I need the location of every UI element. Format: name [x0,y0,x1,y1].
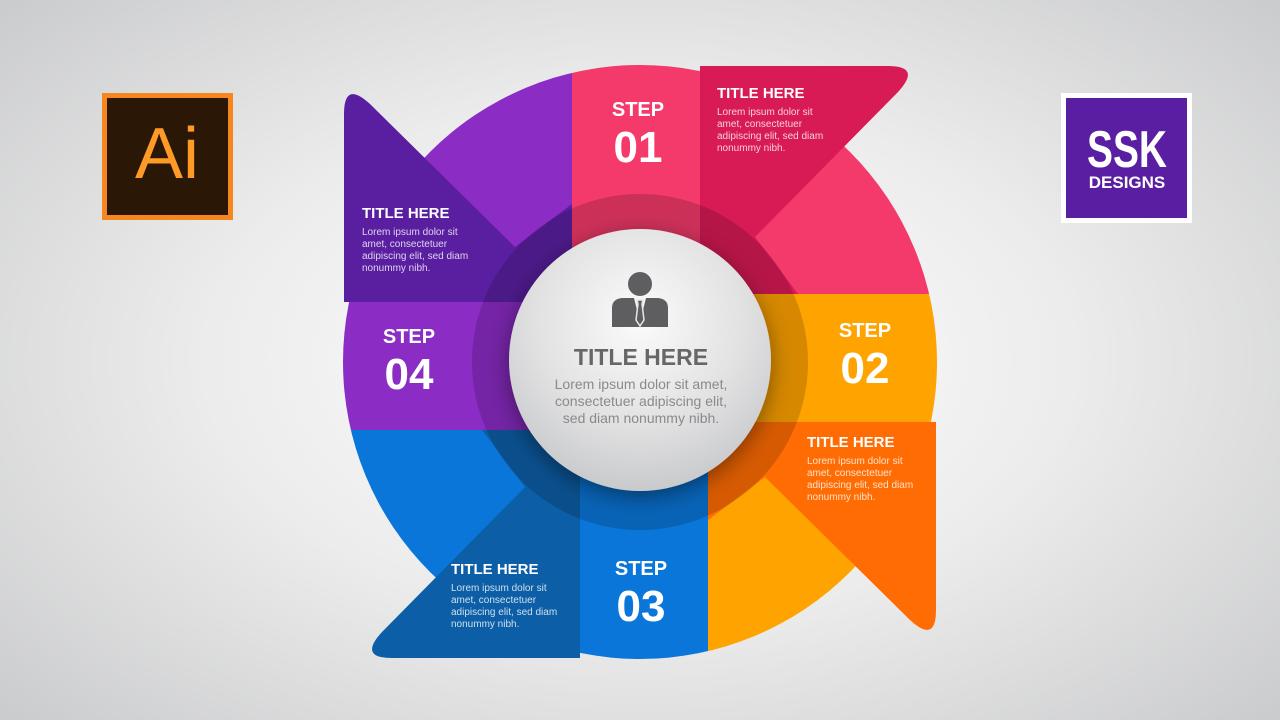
step 02 label: 02 [841,344,889,393]
text block: step 04: TITLE HERE [362,205,450,222]
text block: step 02: amet, consectetuer [807,468,893,479]
cycle diagram [343,65,937,659]
text block: step 01: Lorem ipsum dolor sit [717,107,813,118]
center text: consectetuer adipiscing elit, [555,393,727,409]
text block: step 02: TITLE HERE [807,434,895,451]
icon: Adobe Illustrator logo: Ai [135,114,199,194]
text block: step 01: TITLE HERE [717,85,805,102]
icon: SSK Designs logo: SSK [1087,121,1167,179]
inner dark ring [472,194,808,530]
icon: SSK Designs logo [1064,96,1190,220]
text block: step 03: adipiscing elit, sed diam [451,607,557,618]
step 03 label [615,558,667,631]
step 02 label: STEP [839,320,891,342]
text block: step 03: Lorem ipsum dolor sit [451,583,547,594]
text block: step 01 [717,85,823,154]
tab: step 03 [372,430,580,658]
text block: step 04: nonummy nibh. [362,263,430,274]
text block: step 02: adipiscing elit, sed diam [807,480,913,491]
text block: step 02 [807,434,913,503]
step 02 label [839,320,891,393]
icon: Adobe Illustrator logo [104,96,230,218]
center title: TITLE HERE [574,344,708,370]
ring segments (light) [343,65,937,659]
icon: person [612,272,668,327]
center text: Lorem ipsum dolor sit amet, [555,376,727,392]
step 03 label: 03 [617,582,665,631]
center text: sed diam nonummy nibh. [563,410,719,426]
center circle [509,229,771,491]
step 03 label: STEP [615,558,667,580]
text block: step 04: amet, consectetuer [362,239,448,250]
text block: step 03: nonummy nibh. [451,619,519,630]
step 04 label: STEP [383,326,435,348]
step 01 label [612,99,664,172]
text block: step 03: amet, consectetuer [451,595,537,606]
text block: step 01: nonummy nibh. [717,143,785,154]
step 04 label [383,326,435,399]
text block: step 01: amet, consectetuer [717,119,803,130]
tab: step 02 [708,422,936,630]
text block: step 01: adipiscing elit, sed diam [717,131,823,142]
text block: step 04: Lorem ipsum dolor sit [362,227,458,238]
step 04 label: 04 [385,350,434,399]
text block: step 03: TITLE HERE [451,561,539,578]
center text [555,376,727,426]
text block: step 02: nonummy nibh. [807,492,875,503]
step 01 label: 01 [614,123,662,172]
icon: SSK Designs logo: DESIGNS [1089,173,1165,192]
text block: step 02: Lorem ipsum dolor sit [807,456,903,467]
step 01 label: STEP [612,99,664,121]
text block: step 03 [451,561,557,630]
text block: step 04: adipiscing elit, sed diam [362,251,468,262]
tab: step 01 [700,66,908,294]
text block: step 04 [362,205,468,274]
tab: step 04 [344,94,572,302]
